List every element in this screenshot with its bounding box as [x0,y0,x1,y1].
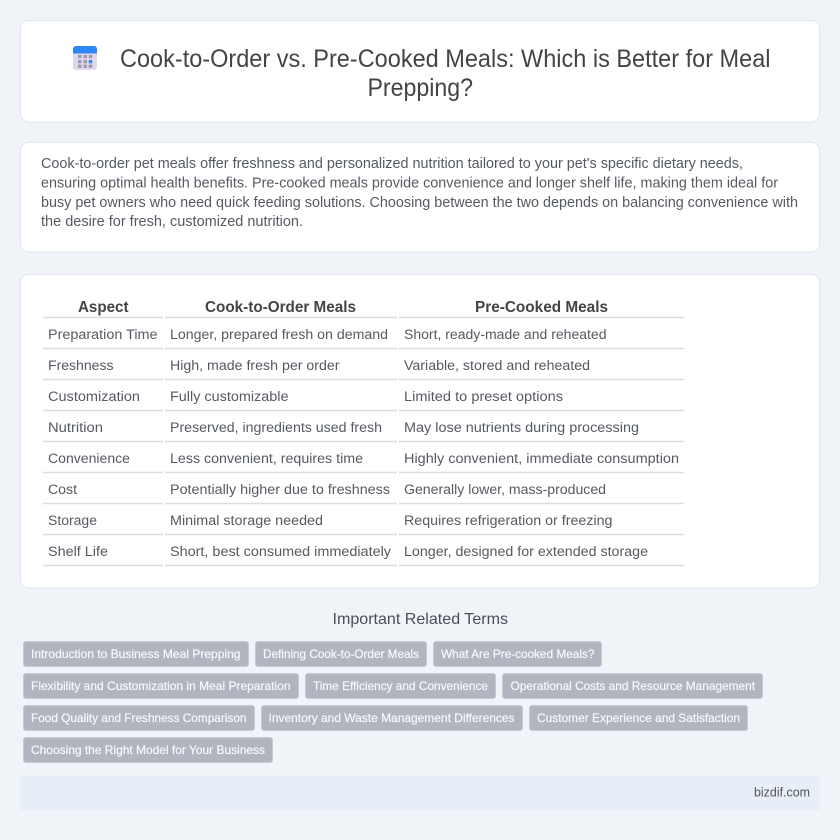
table row: preparation time: Short, ready-made and reheated [404,327,606,343]
table row: nutrition: Nutrition [48,420,103,436]
panel: introduction [20,142,820,252]
table row: convenience: Highly convenient, immediate consumption [404,451,679,467]
table header row: Aspect [78,299,128,316]
table row: convenience: Convenience [48,451,130,467]
title [120,45,770,102]
table row: cost: Cost [48,482,77,498]
table row: cost: Potentially higher due to freshness [170,482,390,498]
panel: header [20,20,820,122]
table row: storage [43,513,684,534]
tag: customer experience [530,706,748,730]
table row: cost [43,482,684,504]
panel: comparison table [20,274,820,588]
table row: freshness: High, made fresh per order [170,358,340,374]
tag: introduction [24,642,248,666]
tag: flexibility [24,674,298,698]
tag: what are pre-cooked meals [434,642,602,666]
text block: introduction paragraph: busy pet owners who need quick feeding solutions. Choosing between the two depends on balancing convenience with [41,195,798,211]
table row: shelf life [43,544,684,566]
tag: flexibility: Flexibility and Customization in Meal Preparation [31,679,290,693]
footer credit: bizdif.com [754,786,810,800]
tag: customer experience: Customer Experience and Satisfaction [537,711,740,725]
table row: storage: Requires refrigeration or freezing [404,513,612,529]
text block: introduction paragraph: ensuring optimal health benefits. Pre-cooked meals provide convenience and longer shelf life, making them ideal for [41,176,778,192]
table header row: Cook-to-Order Meals [205,299,356,316]
tag: choosing the right model: Choosing the Right Model for Your Business [31,743,265,757]
table row: nutrition [43,420,684,442]
table row: shelf life: Longer, designed for extended storage [404,544,648,560]
table row: preparation time [43,327,684,348]
table header row [43,299,684,318]
tag: what are pre-cooked meals: What Are Pre-cooked Meals? [441,647,595,661]
table row: shelf life: Shelf Life [48,544,108,560]
icon: calendar [73,46,97,70]
table row: customization [43,389,684,410]
tag: food quality: Food Quality and Freshness Comparison [31,711,246,725]
title: Cook-to-Order vs. Pre-Cooked Meals: Which is Better for Meal [120,45,770,73]
table row: nutrition: May lose nutrients during processing [404,420,639,436]
title: Prepping? [368,74,473,102]
text block: introduction paragraph: Cook-to-order pet meals offer freshness and personalized nutrition tailored to your pet's specific dietary needs, [41,156,743,172]
text block: introduction paragraph [41,156,798,230]
heading: important related terms: Important Related Terms [332,611,508,628]
table row: cost: Generally lower, mass-produced [404,482,606,498]
tag: inventory [262,706,522,730]
table row: customization: Fully customizable [170,389,289,405]
footer [20,776,820,810]
tag: choosing the right model [24,738,272,762]
table row: shelf life: Short, best consumed immediately [170,544,392,560]
table row: convenience [43,451,684,472]
tag: food quality [24,706,254,730]
table row: preparation time: Preparation Time [48,327,158,343]
table row: convenience: Less convenient, requires time [170,451,363,467]
tag: operational costs [502,674,762,698]
tag: operational costs: Operational Costs and Resource Management [510,679,756,693]
table row: nutrition: Preserved, ingredients used fresh [170,420,382,436]
table row: preparation time: Longer, prepared fresh on demand [170,327,388,343]
tag: defining cook-to-order [256,642,426,666]
table row: storage: Minimal storage needed [170,513,323,529]
tag: time efficiency [306,674,496,698]
text block: introduction paragraph: the desire for fresh, customized nutrition. [41,214,303,230]
table row: customization: Limited to preset options [404,389,563,405]
tag: time efficiency: Time Efficiency and Convenience [313,679,488,693]
table row: freshness: Variable, stored and reheated [404,358,590,374]
table row: customization: Customization [48,389,140,405]
tag: introduction: Introduction to Business Meal Prepping [31,647,240,661]
table row: storage: Storage [48,513,97,529]
related terms tags [24,642,762,762]
tag: defining cook-to-order: Defining Cook-to-Order Meals [263,647,419,661]
table row: freshness: Freshness [48,358,114,374]
tag: inventory: Inventory and Waste Management Differences [268,711,514,725]
table header row: Pre-Cooked Meals [475,299,608,316]
table row: freshness [43,358,684,380]
